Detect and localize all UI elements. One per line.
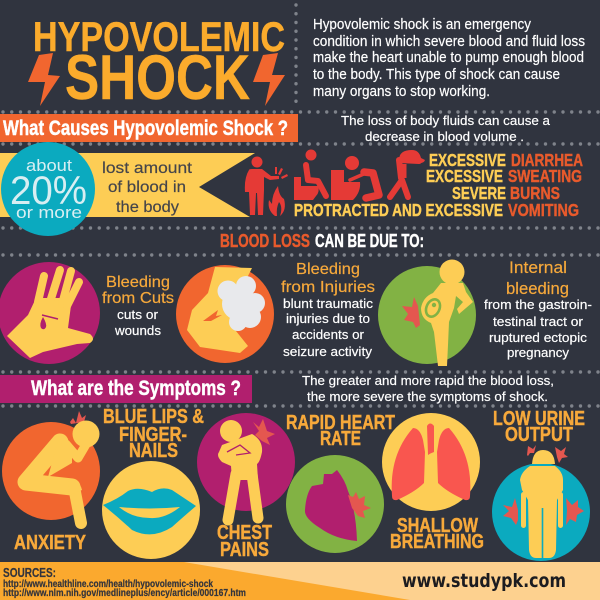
intro text xyxy=(313,17,585,100)
icon: person with burn injury xyxy=(390,150,425,197)
text: internal bleeding: pregnancy xyxy=(507,345,570,360)
icon: chest pain xyxy=(197,413,295,520)
icon: person on toilet xyxy=(294,150,326,200)
text: internal bleeding: from the gastroin- xyxy=(484,297,592,312)
icon: right lightning bolt xyxy=(253,53,285,106)
heading: what causes: What Causes Hypovolemic Shock ? xyxy=(3,117,288,140)
text: bleeding from cuts: wounds xyxy=(114,323,162,338)
footer background xyxy=(0,562,600,600)
heading: what causes xyxy=(0,114,298,142)
text: internal bleeding xyxy=(484,259,592,360)
label: chest pains: PAINS xyxy=(220,539,269,561)
label: chest pains: CHEST xyxy=(217,522,272,544)
causes list: SWEATING xyxy=(508,166,582,186)
label: shallow breathing: BREATHING xyxy=(390,531,484,553)
intro text: condition in which severe blood and fluid loss xyxy=(313,34,585,50)
causes list: PROTRACTED AND EXCESSIVE xyxy=(294,200,503,220)
intro text: Hypovolemic shock is an emergency xyxy=(313,17,532,33)
text: bleeding from cuts xyxy=(102,274,174,338)
stat circle: 20%: or more xyxy=(16,203,82,222)
label: blue lips xyxy=(103,406,204,462)
label: blue lips: FINGER- xyxy=(119,424,187,446)
symptoms note: The greater and more rapid the blood loss, xyxy=(302,373,554,388)
icon: anxiety xyxy=(2,411,100,523)
sources: http://www.nlm.nih.gov/medlineplus/ency/article/000167.htm xyxy=(3,588,246,599)
fluid loss note: The loss of body fluids can cause a xyxy=(341,113,551,128)
fluid loss note: decrease in blood volume . xyxy=(365,129,524,144)
text: bleeding from injuries xyxy=(281,261,375,359)
text: internal bleeding: Internal xyxy=(509,259,567,277)
label: blue lips: NAILS xyxy=(129,440,178,462)
text: bleeding from injuries: from Injuries xyxy=(281,279,375,296)
label: blue lips: BLUE LIPS & xyxy=(103,406,204,428)
website: www.studypk.com xyxy=(402,570,566,592)
banner text: the body xyxy=(116,199,179,216)
text: bleeding from injuries: accidents or xyxy=(292,327,365,342)
text: bleeding from injuries: seizure activity xyxy=(283,344,373,359)
label: rapid heart rate: RAPID HEART xyxy=(286,412,395,434)
stat circle: 20%: 20% xyxy=(10,169,87,213)
causes list: SEVERE xyxy=(452,183,506,203)
label: anxiety: ANXIETY xyxy=(14,532,87,554)
icon: injured ankle xyxy=(176,265,274,363)
causes list: EXCESSIVE xyxy=(426,166,503,186)
banner text xyxy=(102,160,193,216)
label: low urine output: OUTPUT xyxy=(505,424,573,446)
heading: blood loss: CAN BE DUE TO: xyxy=(315,231,424,251)
icon: lips xyxy=(102,461,200,559)
sources xyxy=(3,565,246,599)
text: internal bleeding: ruptured ectopic xyxy=(489,330,588,345)
icon: pregnant woman xyxy=(378,260,476,366)
heading: symptoms xyxy=(0,375,252,403)
icon: person vomiting into toilet xyxy=(331,156,379,200)
label: rapid heart rate: RATE xyxy=(320,428,361,450)
text: bleeding from injuries: Bleeding xyxy=(296,261,360,278)
text: bleeding from cuts: cuts or xyxy=(117,307,159,322)
sources: http://www.healthline.com/health/hypovolemic-shock xyxy=(3,579,213,590)
heading: blood loss: BLOOD LOSS xyxy=(220,231,310,251)
intro text: to the body. This type of shock can cause xyxy=(313,67,560,83)
label: chest pains xyxy=(217,522,272,561)
causes list: EXCESSIVE xyxy=(429,150,506,170)
fluid loss note xyxy=(341,113,551,144)
intro text: make the heart unable to pump enough blood xyxy=(313,50,584,66)
stat circle: 20% xyxy=(1,142,95,236)
causes list: BURNS xyxy=(510,183,560,203)
text: bleeding from injuries: injuries due to xyxy=(286,311,370,326)
label: rapid heart rate xyxy=(286,412,395,450)
banner text: of blood in xyxy=(108,179,186,196)
title xyxy=(33,13,285,113)
text: internal bleeding: bleeding xyxy=(506,280,569,298)
symptoms note xyxy=(302,373,554,404)
label: low urine output xyxy=(493,408,585,446)
icon: left lightning bolt xyxy=(28,53,60,106)
icon: body with kidney pain xyxy=(492,445,590,561)
icon: man by fire xyxy=(245,156,288,216)
causes list: VOMITING xyxy=(508,200,579,220)
causes list xyxy=(294,150,583,220)
text: bleeding from injuries: blunt traumatic xyxy=(283,296,374,311)
heading: symptoms: What are the Symptoms ? xyxy=(31,377,241,400)
label: shallow breathing xyxy=(390,515,484,553)
text: bleeding from cuts: Bleeding xyxy=(106,274,170,291)
stat circle: 20%: about xyxy=(26,156,72,175)
icon: heart xyxy=(286,455,384,553)
title: HYPOVOLEMIC xyxy=(33,13,285,60)
title: SHOCK xyxy=(65,43,250,113)
icon: lungs xyxy=(382,413,480,511)
symptoms note: the more severe the symptoms of shock. xyxy=(307,389,548,404)
heading: blood loss xyxy=(220,231,424,251)
label: shallow breathing: SHALLOW xyxy=(397,515,478,537)
text: internal bleeding: testinal tract or xyxy=(493,314,584,329)
banner text: lost amount xyxy=(102,160,193,177)
icon: cut hand xyxy=(0,262,100,364)
text: bleeding from cuts: from Cuts xyxy=(102,290,174,307)
yellow banner xyxy=(0,153,255,217)
intro text: many organs to stop working. xyxy=(313,84,490,100)
sources: SOURCES: xyxy=(3,565,56,580)
